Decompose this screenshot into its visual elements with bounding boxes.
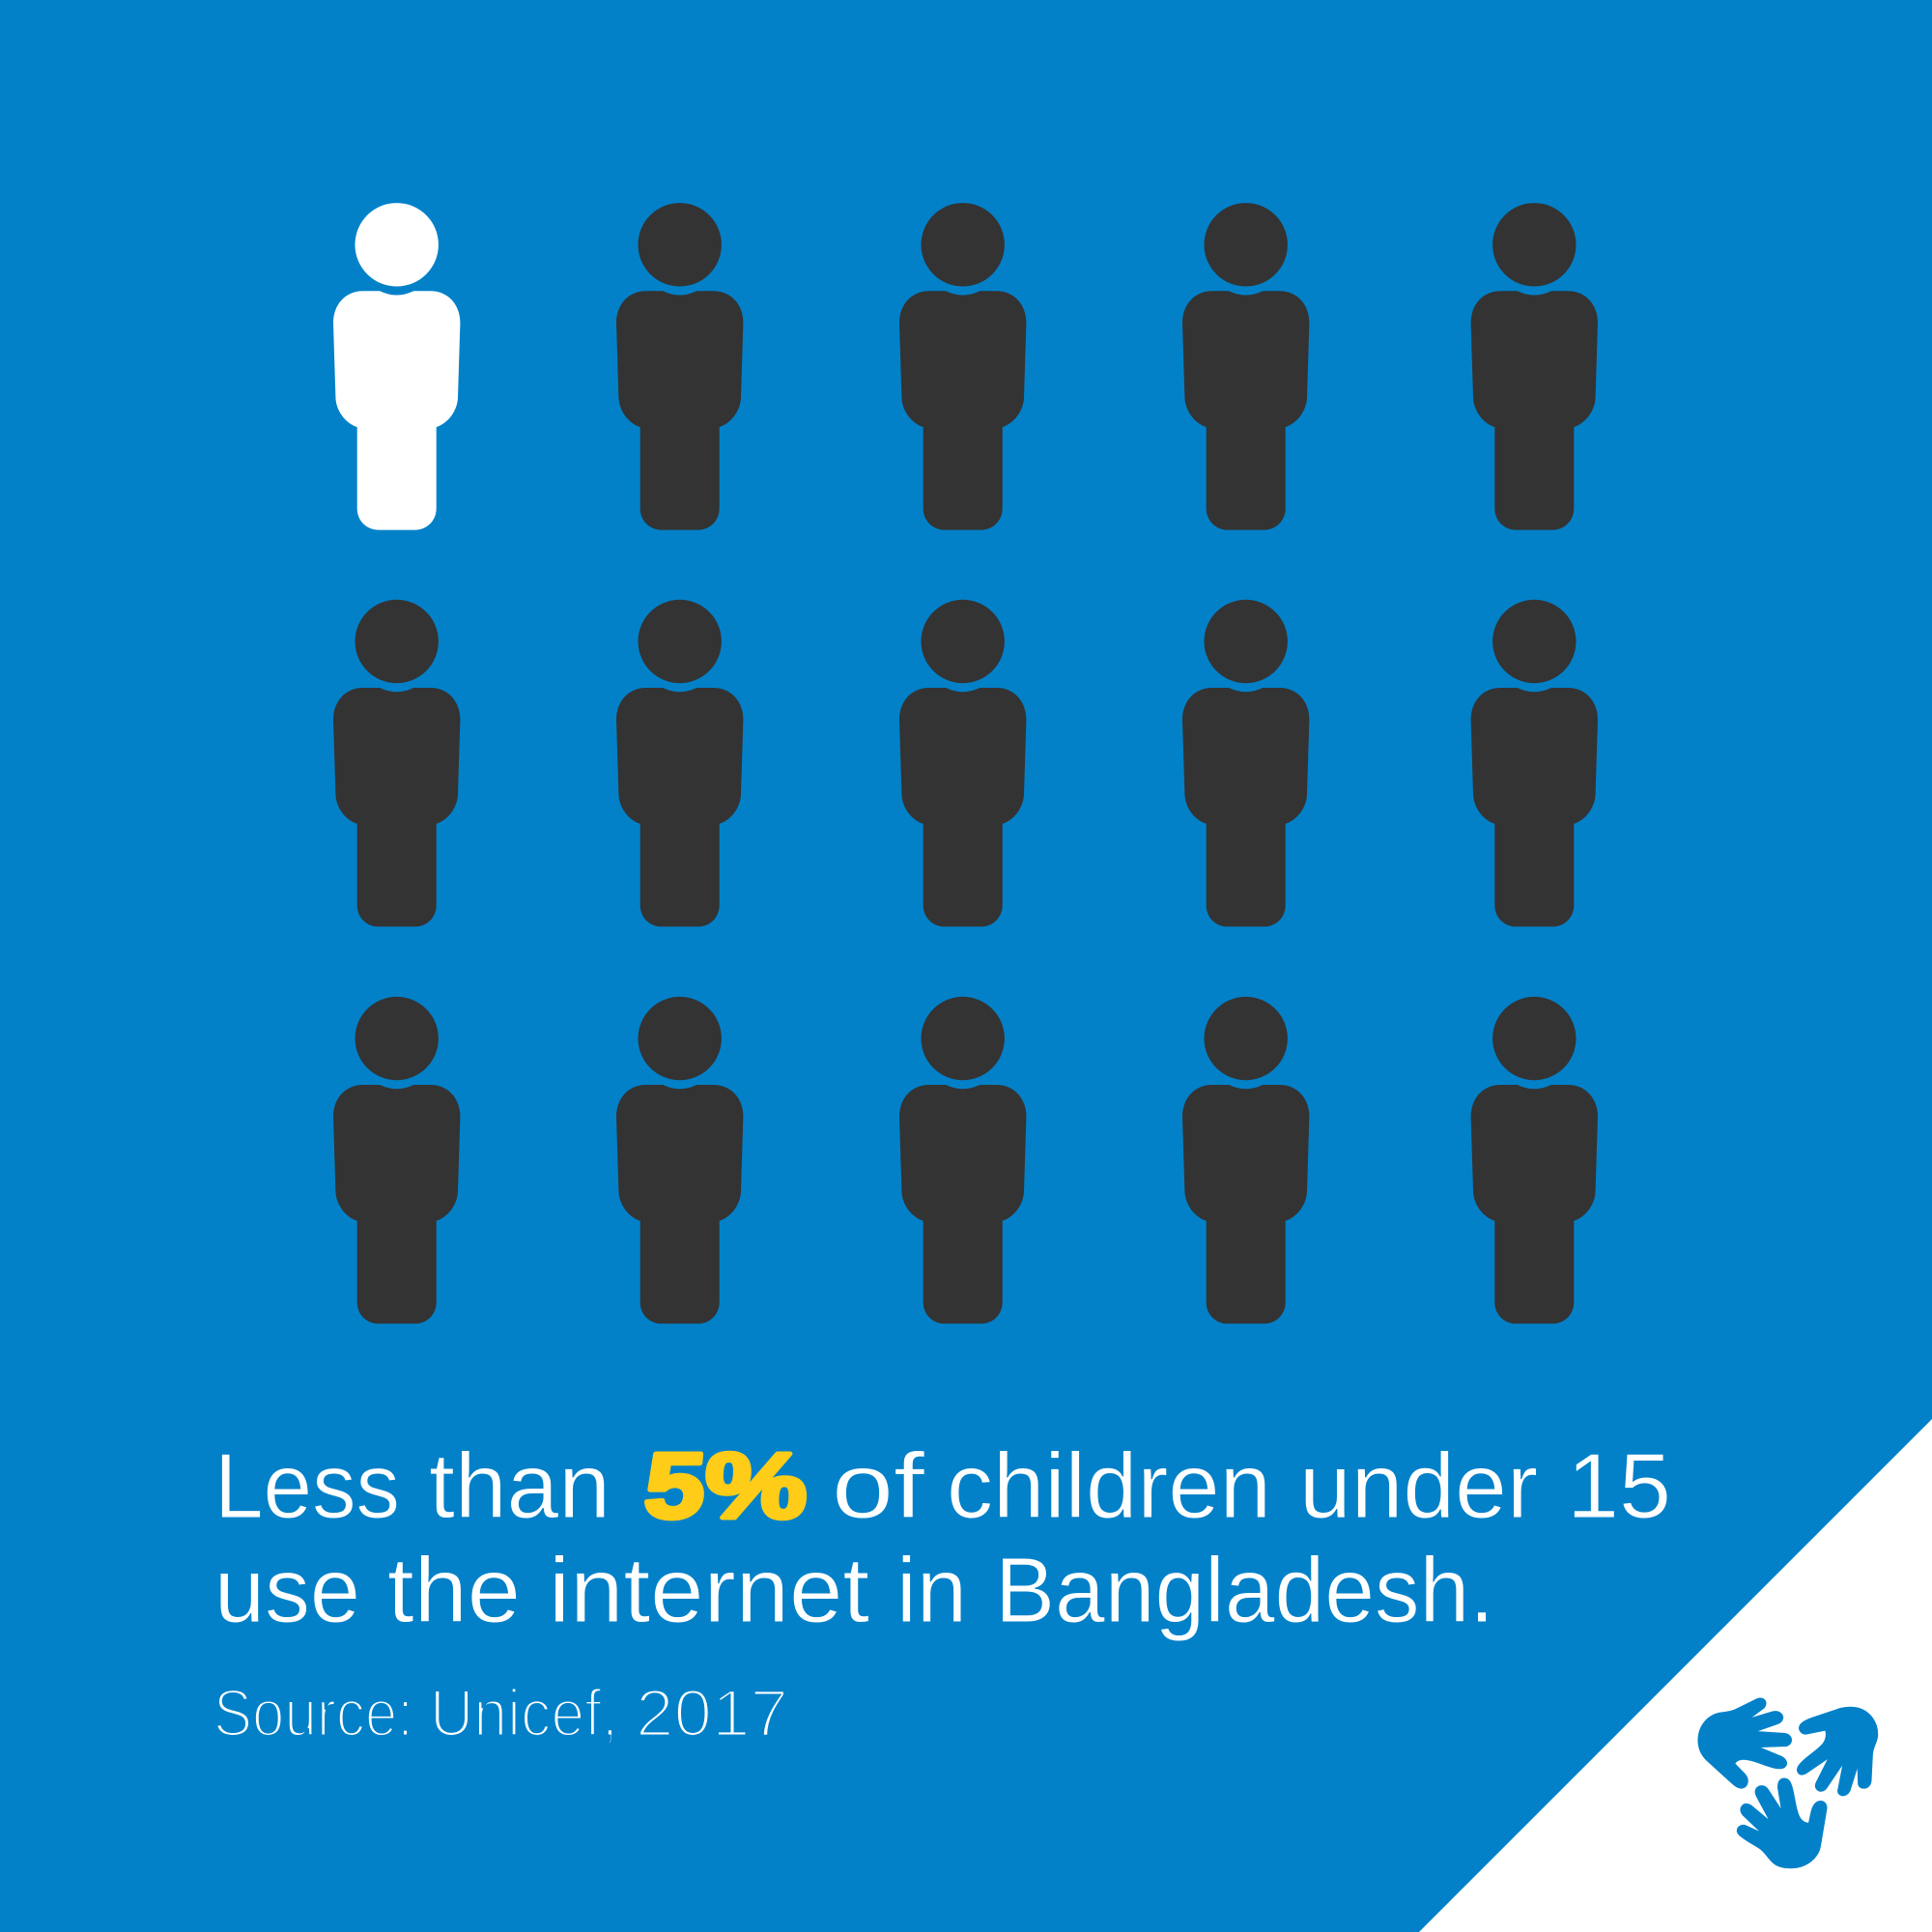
headline: internet bbox=[549, 1539, 869, 1642]
icon: child row 3 col 4 bbox=[1182, 997, 1309, 1323]
icon: child row 3 col 3 bbox=[899, 997, 1026, 1323]
icon: child row 2 col 3 bbox=[899, 600, 1026, 926]
highlighted figure: 5%: 5 bbox=[640, 1435, 710, 1538]
headline: in bbox=[896, 1539, 967, 1642]
icon: child row 3 col 1 bbox=[333, 997, 460, 1323]
highlighted figure: 5% bbox=[640, 1435, 810, 1538]
icon: child row 1 col 4 bbox=[1182, 203, 1309, 530]
icon: child row 2 col 2 bbox=[616, 600, 743, 926]
headline: use bbox=[214, 1539, 360, 1642]
source line: Source: bbox=[213, 1676, 413, 1750]
icon: three hands logo bbox=[1698, 1698, 1877, 1867]
icon: child row 2 col 4 bbox=[1182, 600, 1309, 926]
source line bbox=[213, 1676, 788, 1750]
source line: 2017 bbox=[636, 1676, 788, 1750]
source line: Unicef, bbox=[430, 1676, 618, 1750]
headline: Less bbox=[214, 1435, 400, 1538]
headline: of bbox=[832, 1435, 924, 1538]
headline bbox=[214, 1435, 1671, 1642]
icon: child row 3 col 2 bbox=[616, 997, 743, 1323]
icon: child row 1 col 5 bbox=[1471, 203, 1598, 530]
headline: the bbox=[387, 1539, 521, 1642]
pictogram grid: 1 of 15 children highlighted bbox=[333, 203, 1598, 1323]
headline: children bbox=[947, 1435, 1271, 1538]
icon: child row 1 col 3 bbox=[899, 203, 1026, 530]
white corner triangle bbox=[1419, 1419, 1932, 1932]
headline: 15 bbox=[1567, 1435, 1671, 1538]
icon: child row 3 col 5 bbox=[1471, 997, 1598, 1323]
headline: under bbox=[1299, 1435, 1538, 1538]
icon: child row 1 col 2 bbox=[616, 203, 743, 530]
headline: Bangladesh. bbox=[995, 1539, 1494, 1642]
highlighted figure: 5%: % bbox=[702, 1435, 810, 1538]
icon: highlighted child (white) bbox=[333, 203, 460, 530]
icon: child row 2 col 1 bbox=[333, 600, 460, 926]
headline: than bbox=[429, 1435, 611, 1538]
icon: child row 2 col 5 bbox=[1471, 600, 1598, 926]
